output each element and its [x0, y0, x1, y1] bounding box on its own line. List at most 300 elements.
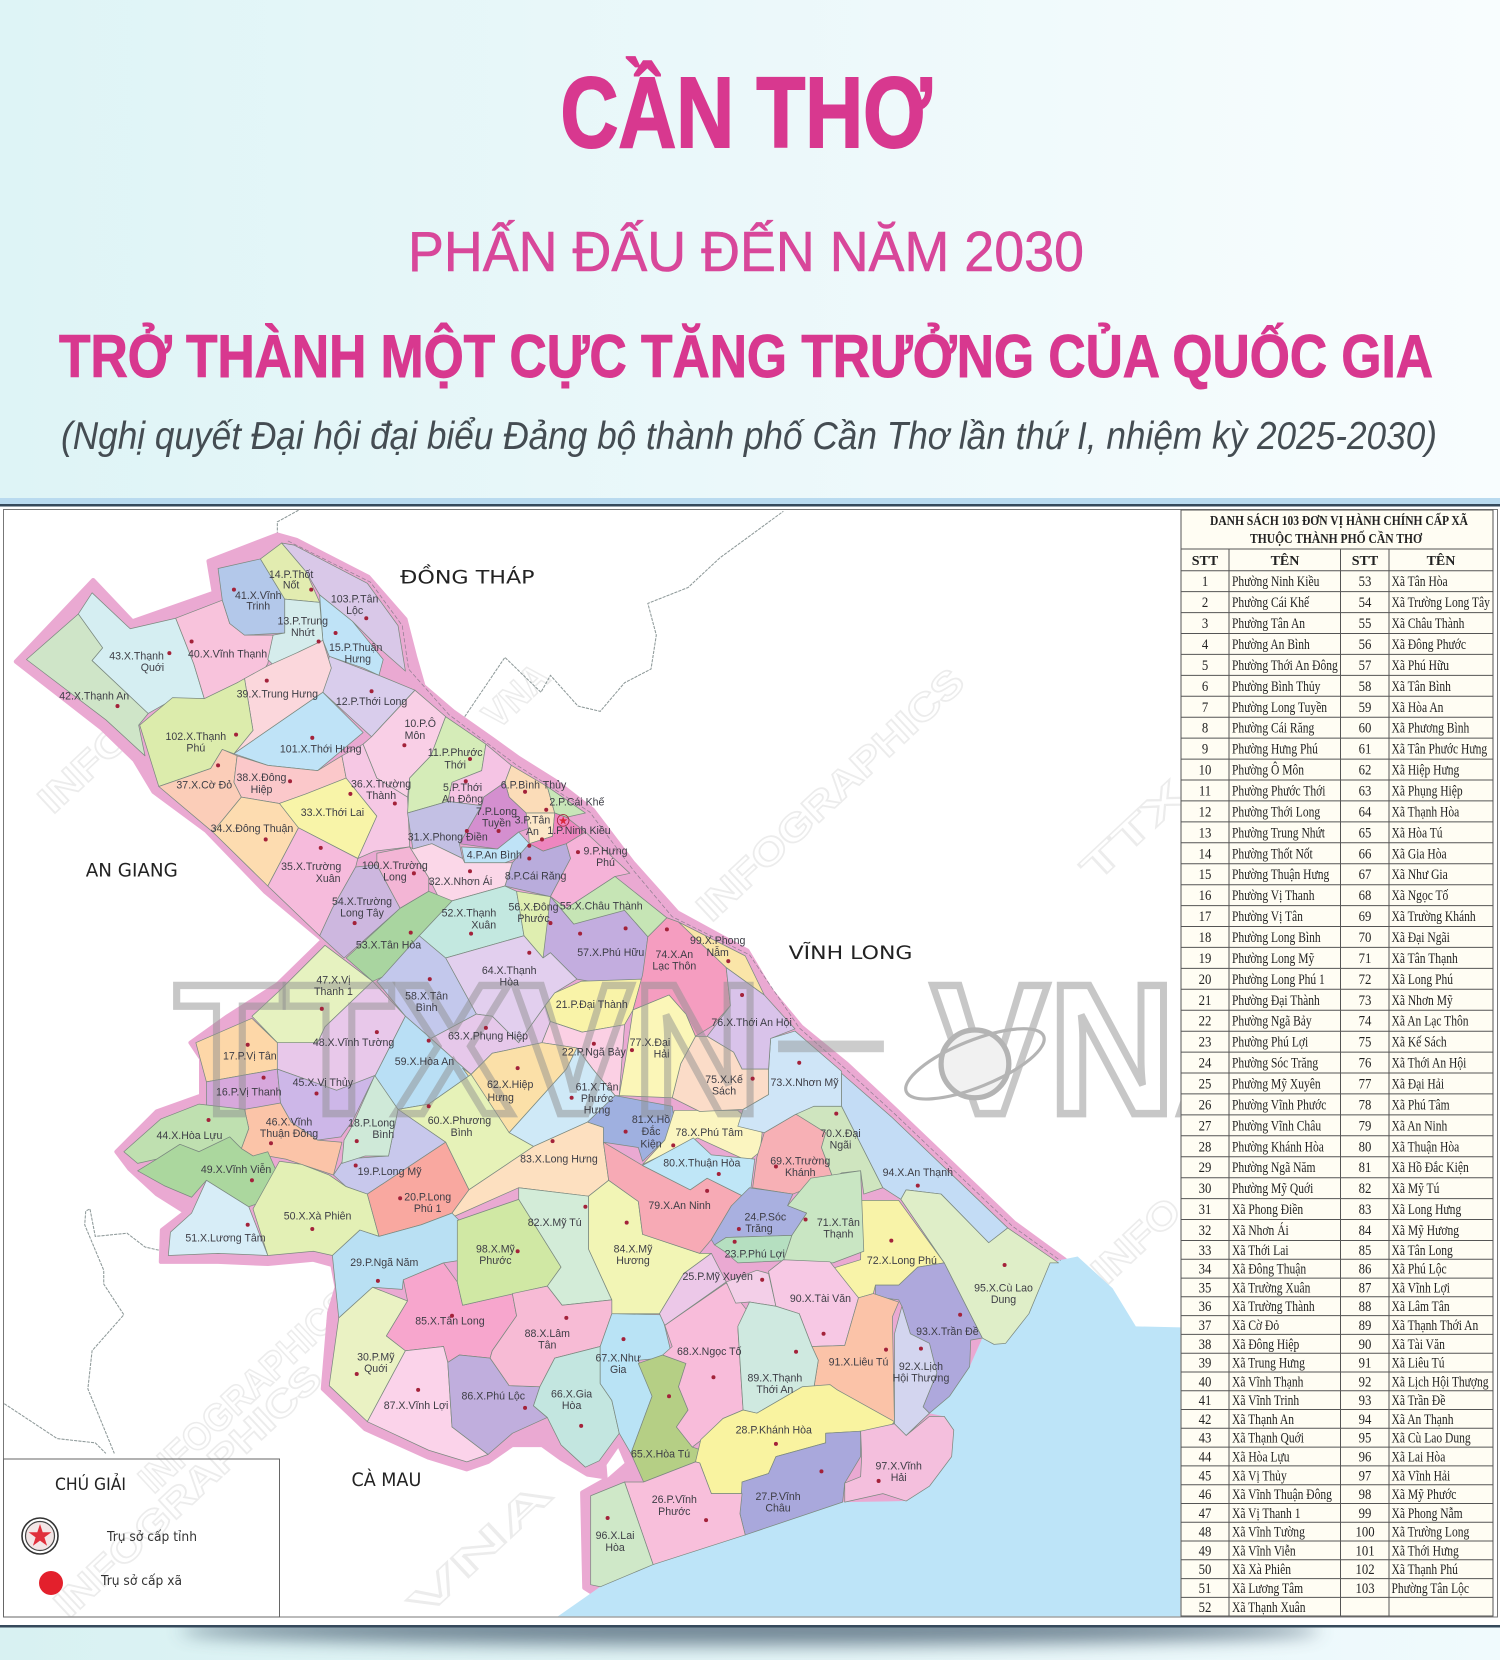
- commune labels: 74.X.An: [655, 949, 693, 961]
- column: names 53-103: Xã Phụng Hiệp: [1392, 782, 1463, 799]
- commune labels: 61.X.Tân: [576, 1081, 619, 1093]
- commune labels: 80.X.Thuận Hòa: [663, 1158, 740, 1170]
- commune labels: 98.X.Mỹ: [476, 1243, 516, 1255]
- table title: [1210, 511, 1469, 547]
- column: names 53-103: Xã Hòa An: [1392, 698, 1444, 715]
- column: names 1-52: Phường Ngã Bảy: [1232, 1012, 1312, 1029]
- column: STT 53-103: 77: [1359, 1077, 1371, 1093]
- commune labels: 63.X.Phụng Hiệp: [448, 1031, 528, 1043]
- column: names 1-52: Xã Trường Thành: [1232, 1298, 1315, 1315]
- column: STT 53-103: 90: [1359, 1337, 1371, 1353]
- column: STT 53-103: 84: [1359, 1223, 1371, 1239]
- column: STT 53-103: 94: [1359, 1412, 1371, 1428]
- column: names 1-52: Phường Khánh Hòa: [1232, 1138, 1324, 1155]
- column: STT 53-103: 63: [1359, 784, 1371, 800]
- watermark: TTXVN - VNA: VNA: [932, 946, 1302, 1154]
- column: STT 53-103: 78: [1359, 1098, 1371, 1114]
- commune labels: Sách: [712, 1086, 736, 1098]
- column: names 1-52: Phường An Bình: [1232, 636, 1310, 652]
- commune labels: Xuân: [316, 873, 341, 885]
- commune labels: Hưng: [487, 1092, 514, 1104]
- column: STT 1-52: 23: [1199, 1035, 1211, 1051]
- commune labels: 6.P.Bình Thủy: [501, 780, 567, 792]
- commune labels: 77.X.Đại: [630, 1037, 670, 1049]
- commune labels: 97.X.Vĩnh: [875, 1460, 922, 1472]
- bottom shadow: [180, 1615, 1320, 1645]
- commune labels: Kiện: [640, 1138, 662, 1150]
- commune labels: 34.X.Đông Thuận: [211, 823, 293, 835]
- column: names 53-103: Xã Thạnh Hòa: [1392, 803, 1459, 820]
- commune labels: 69.X.Trường: [770, 1155, 830, 1167]
- commune labels: Khánh: [785, 1167, 816, 1179]
- column: STT 1-52: 18: [1199, 930, 1211, 946]
- column: STT 53-103: 98: [1359, 1487, 1371, 1503]
- commune labels: 79.X.An Ninh: [648, 1200, 711, 1212]
- commune labels: 46.X.Vĩnh: [266, 1116, 312, 1128]
- column: names 53-103: Xã Đại Hải: [1392, 1075, 1444, 1092]
- column: names 1-52: Xã Vị Thủy: [1232, 1467, 1287, 1484]
- column: STT 1-52: 7: [1202, 700, 1208, 716]
- column: STT 53-103: 97: [1359, 1468, 1371, 1485]
- table header: STT: [1192, 554, 1219, 569]
- commune labels: Lạc Thôn: [652, 961, 696, 973]
- column: STT 1-52: 22: [1199, 1014, 1211, 1030]
- commune labels: 82.X.Mỹ Tú: [528, 1217, 582, 1229]
- column: names 1-52: Xã Lương Tâm: [1232, 1580, 1304, 1596]
- commune labels: 42.X.Thạnh An: [59, 691, 129, 703]
- column: STT 1-52: 12: [1199, 805, 1211, 821]
- commune labels: Xuân: [471, 919, 496, 931]
- column: STT 1-52: 9: [1202, 742, 1208, 758]
- column: names 1-52: Xã Đông Thuận: [1232, 1260, 1306, 1277]
- commune labels: 68.X.Ngọc Tố: [677, 1346, 742, 1358]
- column: names 1-52: Phường Long Mỹ: [1232, 949, 1315, 966]
- commune labels: Lộc: [346, 605, 364, 617]
- column: names 53-103: Xã Cù Lao Dung: [1392, 1429, 1471, 1446]
- column: names 1-52: [1232, 573, 1338, 1615]
- column: STT 1-52: 38: [1199, 1337, 1211, 1353]
- column: STT 53-103: 70: [1359, 930, 1371, 946]
- column: names 53-103: Xã Đại Ngãi: [1392, 929, 1450, 945]
- column: STT 1-52: 40: [1199, 1375, 1211, 1391]
- column: names 53-103: Xã Hồ Đắc Kiện: [1392, 1159, 1469, 1176]
- commune labels: 81.X.Hồ: [632, 1114, 670, 1126]
- column: names 53-103: Xã Gia Hòa: [1392, 845, 1447, 862]
- column: STT 53-103: 103: [1355, 1581, 1375, 1597]
- column: STT 53-103: 73: [1359, 993, 1371, 1009]
- neighbouring province names: CÀ MAU: [351, 1468, 421, 1491]
- commune labels: Phú: [596, 857, 615, 869]
- column: names 1-52: Xã Vĩnh Viễn: [1232, 1542, 1296, 1559]
- column: names 53-103: [1392, 573, 1490, 1596]
- table header: STT: [1352, 554, 1379, 569]
- column: names 1-52: Phường Đại Thành: [1232, 991, 1320, 1008]
- commune labels: Nhứt: [291, 627, 315, 639]
- column: names 53-103: Xã Phú Hữu: [1392, 656, 1449, 673]
- commune labels: Hòa: [605, 1542, 625, 1554]
- column: names 1-52: Xã Cờ Đỏ: [1232, 1317, 1279, 1333]
- column: names 1-52: Xã Thạnh Xuân: [1232, 1598, 1306, 1615]
- column: names 1-52: Phường Phước Thới: [1232, 782, 1326, 799]
- commune labels: Thanh 1: [314, 986, 353, 998]
- faint diagonal watermarks: INFOGRAPHICS: [689, 661, 973, 930]
- column: STT 1-52: 42: [1199, 1412, 1211, 1428]
- column: STT 53-103: 86: [1359, 1262, 1371, 1278]
- commune labels: 41.X.Vĩnh: [235, 590, 282, 602]
- commune labels: 65.X.Hòa Tú: [631, 1449, 690, 1461]
- column: names 53-103: Xã Trường Long Tây: [1392, 594, 1490, 610]
- commune labels: Tân: [538, 1340, 557, 1352]
- commune labels: Trinh: [246, 601, 270, 613]
- commune labels: 45.X.Vị Thủy: [293, 1077, 354, 1089]
- commune labels: Thành: [366, 790, 396, 802]
- commune labels: Thuận Đông: [260, 1128, 318, 1140]
- column: STT 53-103: 68: [1359, 888, 1371, 905]
- commune labels: 39.X.Trung Hưng: [237, 689, 318, 701]
- watermark: TTXVN - VNA: [173, 982, 1180, 1118]
- commune labels: Châu: [765, 1503, 791, 1515]
- commune labels: [59, 569, 1033, 1554]
- column: STT 53-103: 76: [1359, 1056, 1371, 1072]
- commune labels: 60.X.Phương: [428, 1115, 491, 1127]
- column: names 1-52: Phường Long Tuyền: [1232, 698, 1327, 715]
- headquarters dots: [115, 588, 1007, 1522]
- commune labels: 52.X.Thạnh: [442, 908, 496, 920]
- column: names 1-52: Xã Hòa Lựu: [1232, 1448, 1290, 1465]
- commune labels: Thới: [444, 760, 466, 772]
- commune labels: 90.X.Tài Văn: [790, 1293, 851, 1305]
- column: STT 53-103: 69: [1359, 909, 1371, 925]
- column: STT 53-103: 95: [1359, 1431, 1371, 1447]
- commune labels: 28.P.Khánh Hòa: [736, 1424, 812, 1436]
- commune labels: 36.X.Trường: [351, 779, 411, 791]
- commune labels: 73.X.Nhơn Mỹ: [770, 1077, 839, 1089]
- column: STT 53-103: 60: [1359, 721, 1371, 737]
- column: STT 1-52: 26: [1199, 1098, 1211, 1114]
- column: names 53-103: Xã Trường Long: [1392, 1523, 1470, 1540]
- column: names 53-103: Xã Vĩnh Lợi: [1392, 1279, 1450, 1296]
- column: names 53-103: Xã Thuận Hòa: [1392, 1138, 1459, 1155]
- panel: map frame: [0, 498, 1500, 1628]
- column: STT 53-103: 80: [1359, 1139, 1371, 1156]
- column: STT 1-52: 46: [1199, 1487, 1211, 1503]
- column: names 53-103: Xã Mỹ Hương: [1392, 1222, 1459, 1238]
- commune labels: 29.P.Ngã Năm: [350, 1257, 418, 1269]
- column: STT 1-52: 33: [1199, 1243, 1211, 1259]
- commune labels: Bình: [416, 1002, 438, 1014]
- column: STT 1-52: 43: [1199, 1431, 1211, 1447]
- column: names 53-103: Xã Lai Hòa: [1392, 1448, 1445, 1465]
- commune labels: 19.P.Long Mỹ: [358, 1166, 422, 1178]
- column: STT 53-103: 99: [1359, 1506, 1371, 1522]
- column: names 53-103: Xã Phú Lộc: [1392, 1260, 1447, 1277]
- table: commune list: [1181, 510, 1493, 1616]
- commune labels: Bình: [451, 1127, 473, 1139]
- column: names 1-52: Phường Long Bình: [1232, 929, 1321, 945]
- commune labels: Long Tây: [340, 908, 385, 920]
- commune labels: Phước: [479, 1255, 512, 1267]
- commune labels: 37.X.Cờ Đỏ: [176, 780, 232, 792]
- column: names 1-52: Phường Vị Tân: [1232, 908, 1303, 924]
- column: STT 1-52: [1199, 574, 1211, 1616]
- commune labels: Trăng: [745, 1223, 773, 1235]
- commune labels: 72.X.Long Phú: [867, 1255, 937, 1267]
- commune labels: 49.X.Vĩnh Viễn: [201, 1163, 271, 1176]
- column: names 53-103: Phường Tân Lộc: [1392, 1580, 1469, 1596]
- column: names 53-103: Xã Tân Phước Hưng: [1392, 740, 1487, 757]
- column: names 53-103: Xã Thạnh Phú: [1392, 1561, 1458, 1578]
- commune labels: 96.X.Lai: [596, 1530, 634, 1542]
- column: names 1-52: Phường Vĩnh Phước: [1232, 1096, 1326, 1113]
- table header: [1192, 552, 1455, 569]
- commune labels: 18.P.Long: [348, 1117, 395, 1129]
- column: names 1-52: Phường Thuận Hưng: [1232, 866, 1330, 883]
- column: names 53-103: Xã An Lạc Thôn: [1392, 1012, 1469, 1029]
- column: names 1-52: Xã Vĩnh Trinh: [1232, 1392, 1299, 1409]
- column: STT 1-52: 11: [1199, 784, 1211, 800]
- commune labels: 103.P.Tân: [331, 593, 378, 605]
- column: names 53-103: Xã Tài Văn: [1392, 1335, 1445, 1352]
- commune labels: Hải: [654, 1049, 670, 1061]
- column: names 53-103: Xã Thới Hưng: [1392, 1542, 1459, 1559]
- column: STT 1-52: 6: [1202, 679, 1208, 695]
- column: STT 1-52: 39: [1199, 1356, 1211, 1372]
- faint diagonal watermarks: INFO: [1084, 1190, 1190, 1293]
- neighbouring province names: VĨNH LONG: [789, 941, 912, 964]
- column: names 1-52: Phường Vĩnh Châu: [1232, 1117, 1321, 1134]
- column: STT 53-103: 87: [1359, 1281, 1371, 1297]
- neighbouring province borders: [4, 510, 783, 1453]
- neighbouring province names: AN GIANG: [86, 859, 178, 881]
- commune labels: 38.X.Đông: [236, 772, 287, 784]
- column: STT 53-103: 75: [1359, 1035, 1371, 1051]
- column: STT 53-103: 62: [1359, 763, 1371, 779]
- commune labels: Hải: [891, 1472, 907, 1484]
- commune labels: 99.X.Phong: [690, 935, 745, 947]
- column: names 1-52: Xã Thạnh Quới: [1232, 1429, 1304, 1446]
- column: names 53-103: Xã Trần Đề: [1392, 1392, 1445, 1409]
- legend text: provincial: Trụ sở cấp tỉnh: [106, 1529, 197, 1545]
- column: names 1-52: Xã Trường Xuân: [1232, 1279, 1311, 1296]
- map: inner dashed border: [288, 541, 1061, 1261]
- commune labels: 76.X.Thới An Hội: [711, 1017, 792, 1029]
- commune labels: Long: [383, 872, 407, 884]
- column: STT 1-52: 34: [1199, 1262, 1211, 1278]
- column: names 53-103: Xã Kế Sách: [1392, 1033, 1447, 1050]
- column: names 1-52: Phường Thới An Đông: [1232, 656, 1338, 673]
- column: STT 1-52: 31: [1199, 1202, 1211, 1218]
- commune labels: 25.P.Mỹ Xuyên: [683, 1271, 753, 1283]
- legend heading: CHÚ GIẢI: [55, 1472, 126, 1495]
- column: names 1-52: Xã Vĩnh Tường: [1232, 1523, 1305, 1540]
- commune labels: 21.P.Đại Thành: [556, 999, 628, 1011]
- column: names 53-103: Xã An Thạnh: [1392, 1410, 1454, 1427]
- column: names 1-52: Xã Đông Hiệp: [1232, 1335, 1300, 1352]
- column: STT 1-52: 24: [1199, 1056, 1211, 1072]
- commune labels: 102.X.Thạnh: [166, 731, 226, 743]
- column: STT 53-103: 89: [1359, 1318, 1371, 1334]
- commune labels: 70.X.Đại: [820, 1128, 861, 1140]
- commune labels: 57.X.Phú Hữu: [577, 947, 644, 959]
- column: STT 53-103: 66: [1359, 846, 1371, 863]
- column: STT 53-103: 92: [1359, 1375, 1371, 1391]
- column: STT 53-103: 72: [1359, 972, 1371, 988]
- column: names 53-103: Xã Liêu Tú: [1392, 1354, 1445, 1371]
- column: STT 53-103: 102: [1355, 1562, 1375, 1579]
- column: STT 53-103: [1355, 574, 1375, 1597]
- title: CẦN THƠ: [560, 57, 932, 169]
- commune labels: 67.X.Như: [596, 1352, 641, 1364]
- commune labels: Ngãi: [830, 1140, 851, 1152]
- column: STT 1-52: 41: [1199, 1393, 1211, 1410]
- commune labels: 33.X.Thới Lai: [301, 807, 364, 819]
- column: names 53-103: Xã Long Phú: [1392, 970, 1453, 987]
- commune labels: 95.X.Cù Lao: [974, 1282, 1033, 1294]
- column: names 1-52: Xã Xà Phiên: [1232, 1561, 1291, 1578]
- column: names 53-103: Xã Tân Thạnh: [1392, 949, 1458, 966]
- commune labels: 58.X.Tân: [405, 990, 448, 1002]
- commune labels: 50.X.Xà Phiên: [284, 1210, 351, 1222]
- commune labels: 84.X.Mỹ: [614, 1243, 653, 1255]
- table header: TÊN: [1427, 552, 1455, 569]
- column: STT 1-52: 10: [1199, 763, 1211, 779]
- column: STT 53-103: 85: [1359, 1243, 1371, 1259]
- faint diagonal watermarks: INFOGRAPHICS: [46, 1357, 330, 1626]
- column: STT 1-52: 20: [1199, 972, 1211, 988]
- column: names 53-103: Xã Như Gia: [1392, 866, 1448, 883]
- commune labels: 47.X.Vị: [316, 974, 351, 986]
- commune labels: 88.X.Lâm: [525, 1328, 570, 1340]
- commune labels: Nẫm: [707, 946, 729, 959]
- commune labels: Hưng: [345, 654, 371, 666]
- column: names 53-103: Xã Trường Khánh: [1392, 908, 1476, 924]
- commune labels: Đắc: [642, 1125, 661, 1138]
- column: STT 53-103: 79: [1359, 1119, 1371, 1135]
- column: STT 53-103: 55: [1359, 616, 1371, 632]
- commune labels: 71.X.Tân: [817, 1217, 860, 1229]
- column: STT 53-103: 101: [1355, 1544, 1375, 1560]
- column: names 1-52: Phường Phú Lợi: [1232, 1033, 1308, 1050]
- column: names 53-103: Xã Long Hưng: [1392, 1201, 1461, 1217]
- commune labels: 11.P.Phước: [428, 747, 483, 759]
- commune labels: 5.P.Thới: [443, 782, 482, 794]
- column: STT 53-103: 96: [1359, 1450, 1371, 1466]
- column: STT 53-103: 56: [1359, 637, 1371, 653]
- commune labels: Quới: [364, 1363, 387, 1375]
- commune labels: 87.X.Vĩnh Lợi: [384, 1400, 448, 1412]
- table header: TÊN: [1271, 552, 1299, 569]
- column: STT 1-52: 32: [1199, 1223, 1211, 1239]
- column: names 53-103: Xã Ngọc Tố: [1392, 887, 1449, 904]
- column: names 53-103: Xã Châu Thành: [1392, 615, 1465, 631]
- column: names 1-52: Xã Thạnh An: [1232, 1410, 1294, 1427]
- commune labels: Phước: [517, 913, 550, 925]
- column: STT 1-52: 5: [1202, 658, 1208, 674]
- column: names 1-52: Xã Nhơn Ái: [1232, 1222, 1289, 1238]
- column: STT 53-103: 71: [1359, 951, 1371, 967]
- commune labels: 51.X.Lương Tâm: [185, 1233, 266, 1245]
- column: STT 53-103: 93: [1359, 1393, 1371, 1410]
- column: STT 1-52: 52: [1199, 1600, 1211, 1616]
- column: STT 53-103: 53: [1359, 574, 1371, 591]
- column: STT 53-103: 65: [1359, 826, 1371, 842]
- column: names 1-52: Phường Cái Răng: [1232, 719, 1315, 736]
- commune labels: 2.P.Cái Khế: [549, 797, 605, 809]
- column: names 1-52: Phường Vị Thanh: [1232, 887, 1315, 904]
- commune labels: 12.P.Thới Long: [336, 696, 407, 708]
- faint diagonal watermarks: [30, 553, 1195, 1626]
- commune labels: 85.X.Tân Long: [415, 1315, 485, 1327]
- column: names 1-52: Phường Bình Thủy: [1232, 677, 1321, 694]
- column: names 53-103: Xã Nhơn Mỹ: [1392, 991, 1453, 1008]
- commune labels: 101.X.Thới Hưng: [280, 744, 362, 756]
- commune labels: 43.X.Thạnh: [109, 650, 164, 662]
- column: names 53-103: Xã Thới An Hội: [1392, 1054, 1467, 1071]
- column: STT 53-103: 59: [1359, 700, 1371, 716]
- column: names 53-103: Xã Lâm Tân: [1392, 1298, 1450, 1315]
- commune labels: 92.X.Lịch: [899, 1361, 943, 1373]
- column: names 1-52: Xã Trung Hưng: [1232, 1354, 1305, 1371]
- commune labels: 91.X.Liêu Tú: [829, 1357, 889, 1369]
- commune labels: 100.X.Trường: [362, 860, 428, 872]
- column: STT 1-52: 15: [1199, 867, 1211, 884]
- commune labels: Hội Thượng: [893, 1372, 949, 1384]
- column: names 1-52: Phường Trung Nhứt: [1232, 824, 1325, 841]
- commune labels: An: [526, 826, 539, 838]
- commune labels: 14.P.Thốt: [269, 569, 313, 581]
- faint diagonal watermarks: INFOGRAPHICS: [30, 553, 315, 822]
- commune labels: 48.X.Vĩnh Tường: [313, 1037, 394, 1049]
- commune labels: 13.P.Trung: [277, 616, 328, 628]
- column: STT 1-52: 36: [1199, 1299, 1211, 1316]
- column: names 53-103: Xã Tân Long: [1392, 1241, 1453, 1258]
- column: STT 1-52: 48: [1199, 1525, 1211, 1541]
- commune labels: Gia: [610, 1364, 627, 1376]
- column: STT 53-103: 58: [1359, 679, 1371, 695]
- commune labels: Phước: [581, 1093, 614, 1105]
- column: STT 1-52: 16: [1199, 888, 1211, 905]
- column: STT 53-103: 82: [1359, 1181, 1371, 1198]
- column: STT 53-103: 88: [1359, 1299, 1371, 1316]
- commune labels: 10.P.Ô: [404, 717, 436, 730]
- commune labels: Môn: [405, 730, 425, 742]
- commune labels: 30.P.Mỹ: [357, 1351, 395, 1363]
- commune labels: 54.X.Trường: [332, 896, 392, 908]
- commune labels: Phú: [186, 743, 205, 755]
- column: STT 53-103: 100: [1355, 1525, 1375, 1541]
- commune labels: 53.X.Tân Hòa: [356, 939, 421, 951]
- column: names 53-103: Xã Hiệp Hưng: [1392, 761, 1460, 778]
- commune labels: 15.P.Thuận: [329, 642, 382, 654]
- column: names 1-52: Xã Thới Lai: [1232, 1241, 1289, 1258]
- icon: provincial headquarters on map: [557, 815, 569, 826]
- commune labels: 64.X.Thạnh: [482, 965, 537, 977]
- column: names 1-52: Xã Vĩnh Thạnh: [1232, 1373, 1304, 1390]
- map: sea: [558, 1257, 1181, 1616]
- commune labels: 59.X.Hòa An: [395, 1056, 454, 1068]
- commune labels: An Đông: [442, 793, 483, 805]
- column: names 1-52: Phường Thốt Nốt: [1232, 845, 1313, 862]
- column: STT 1-52: 21: [1199, 993, 1211, 1009]
- commune labels: Hiệp: [251, 784, 272, 796]
- icon: commune headquarters: [39, 1571, 63, 1595]
- commune labels: 4.P.An Bình: [467, 850, 522, 862]
- column: STT 1-52: 45: [1199, 1468, 1211, 1485]
- map: communes: [26, 543, 1059, 1587]
- column: names 1-52: Phường Sóc Trăng: [1232, 1054, 1318, 1071]
- column: names 1-52: Phường Hưng Phú: [1232, 740, 1318, 757]
- commune labels: Thới An: [756, 1384, 793, 1396]
